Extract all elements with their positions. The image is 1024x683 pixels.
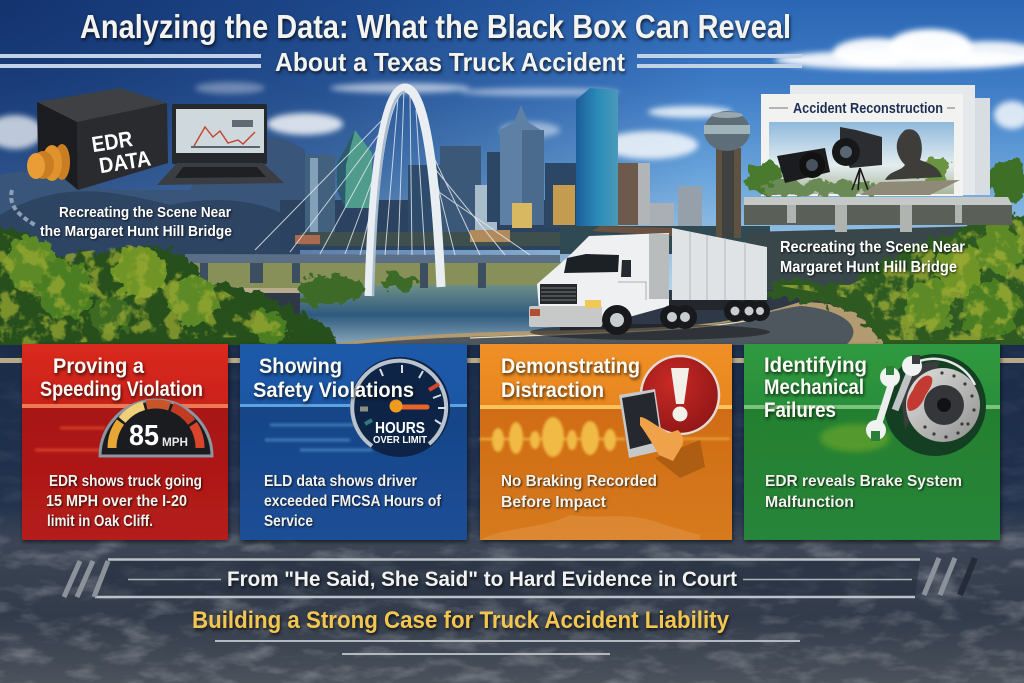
caption: right: Recreating the Scene Near (780, 239, 965, 256)
text: safety description: Service (264, 513, 313, 530)
text: mechanical description (765, 473, 962, 511)
text: safety description (264, 473, 442, 530)
label: EDR DATA: DATA (97, 145, 153, 178)
icon: laptop with chart (157, 104, 284, 185)
label: EDR DATA (90, 124, 153, 179)
heading: identifying mechanical failures: Mechanical (764, 376, 864, 399)
heading: identifying mechanical failures (764, 354, 867, 422)
caption: left: the Margaret Hunt Hill Bridge (40, 223, 232, 240)
right hillside and trees (745, 225, 1024, 290)
panel: distraction (480, 344, 732, 540)
panel: safety violations (240, 344, 467, 540)
bottom banner (64, 558, 975, 654)
asphalt ground (0, 345, 1024, 683)
text: distraction description (501, 473, 657, 511)
title (80, 8, 791, 77)
label: EDR DATA: EDR (90, 126, 134, 157)
text: safety description: exceeded FMCSA Hours of (264, 493, 442, 510)
heading: demonstrating distraction (501, 355, 640, 402)
Margaret Hunt Hill Bridge (185, 88, 560, 296)
title: About a Texas Truck Accident (275, 47, 625, 77)
text: distraction description: Before Impact (501, 494, 607, 511)
city skyline (280, 88, 770, 254)
road (320, 302, 890, 346)
text: mechanical description: EDR reveals Brake System (765, 473, 962, 490)
EDR black box (27, 88, 168, 190)
semi truck (529, 226, 770, 340)
text: mechanical description: Malfunction (765, 494, 854, 511)
Reunion Tower (704, 111, 750, 238)
left trees (0, 229, 350, 352)
icon: hours over limit gauge: OVER LIMIT (373, 435, 427, 446)
heading: showing safety violations: Safety Violations (253, 379, 414, 402)
text: speeding description: 15 MPH over the I-20 (46, 493, 187, 510)
waveform (480, 417, 730, 457)
heading: proving a speeding violation: Speeding Violation (40, 378, 203, 401)
sky background (0, 0, 1024, 290)
caption: right: Margaret Hunt Hill Bridge (780, 259, 957, 276)
heading: demonstrating distraction: Demonstrating (501, 355, 640, 378)
accident reconstruction board (745, 85, 990, 196)
stone bridge (744, 197, 1012, 232)
icon: brake disc and wrenches (866, 354, 986, 456)
text: distraction description: No Braking Recorded (501, 473, 657, 490)
panel: speeding violation (22, 344, 228, 540)
icon: phone and hand (619, 389, 705, 478)
clouds (0, 29, 1024, 159)
text: gold liability line: Building a Strong Case for Truck Accident Liability (192, 607, 730, 634)
text: safety description: ELD data shows driver (264, 473, 417, 490)
heading: identifying mechanical failures: Failures (764, 399, 836, 422)
icon: hours over limit gauge: HOURS (375, 420, 425, 437)
icon: 85 mph gauge: MPH (162, 435, 188, 449)
text: speeding description: limit in Oak Cliff. (47, 513, 153, 530)
heading: showing safety violations (253, 355, 414, 402)
heading: demonstrating distraction: Distraction (501, 379, 604, 402)
caption: right (780, 239, 965, 276)
text: hard evidence line: From "He Said, She Said" to Hard Evidence in Court (227, 567, 737, 591)
mid ground and river (180, 262, 580, 292)
caption: left: Recreating the Scene Near (59, 204, 231, 221)
small trees near bridge (296, 274, 418, 305)
heading: identifying mechanical failures: Identifying (764, 354, 867, 377)
heading: showing safety violations: Showing (259, 355, 342, 378)
icon: alert circle (641, 356, 719, 434)
heading: accident reconstruction: Accident Reconstruction (793, 100, 943, 117)
text: speeding description (46, 473, 202, 530)
icon: 85 mph gauge (100, 400, 212, 456)
heading: proving a speeding violation (40, 355, 203, 401)
title lines (0, 54, 802, 68)
caption: left (40, 204, 232, 240)
heading: proving a speeding violation: Proving a (53, 355, 144, 378)
title: Analyzing the Data: What the Black Box Can Reveal (80, 8, 791, 45)
icon: 85 mph gauge: 85 (129, 420, 159, 452)
hills behind EDR box (0, 137, 320, 250)
panel: mechanical failures (744, 344, 1000, 540)
icon: hours over limit gauge (350, 357, 450, 457)
text: speeding description: EDR shows truck going (49, 473, 202, 490)
